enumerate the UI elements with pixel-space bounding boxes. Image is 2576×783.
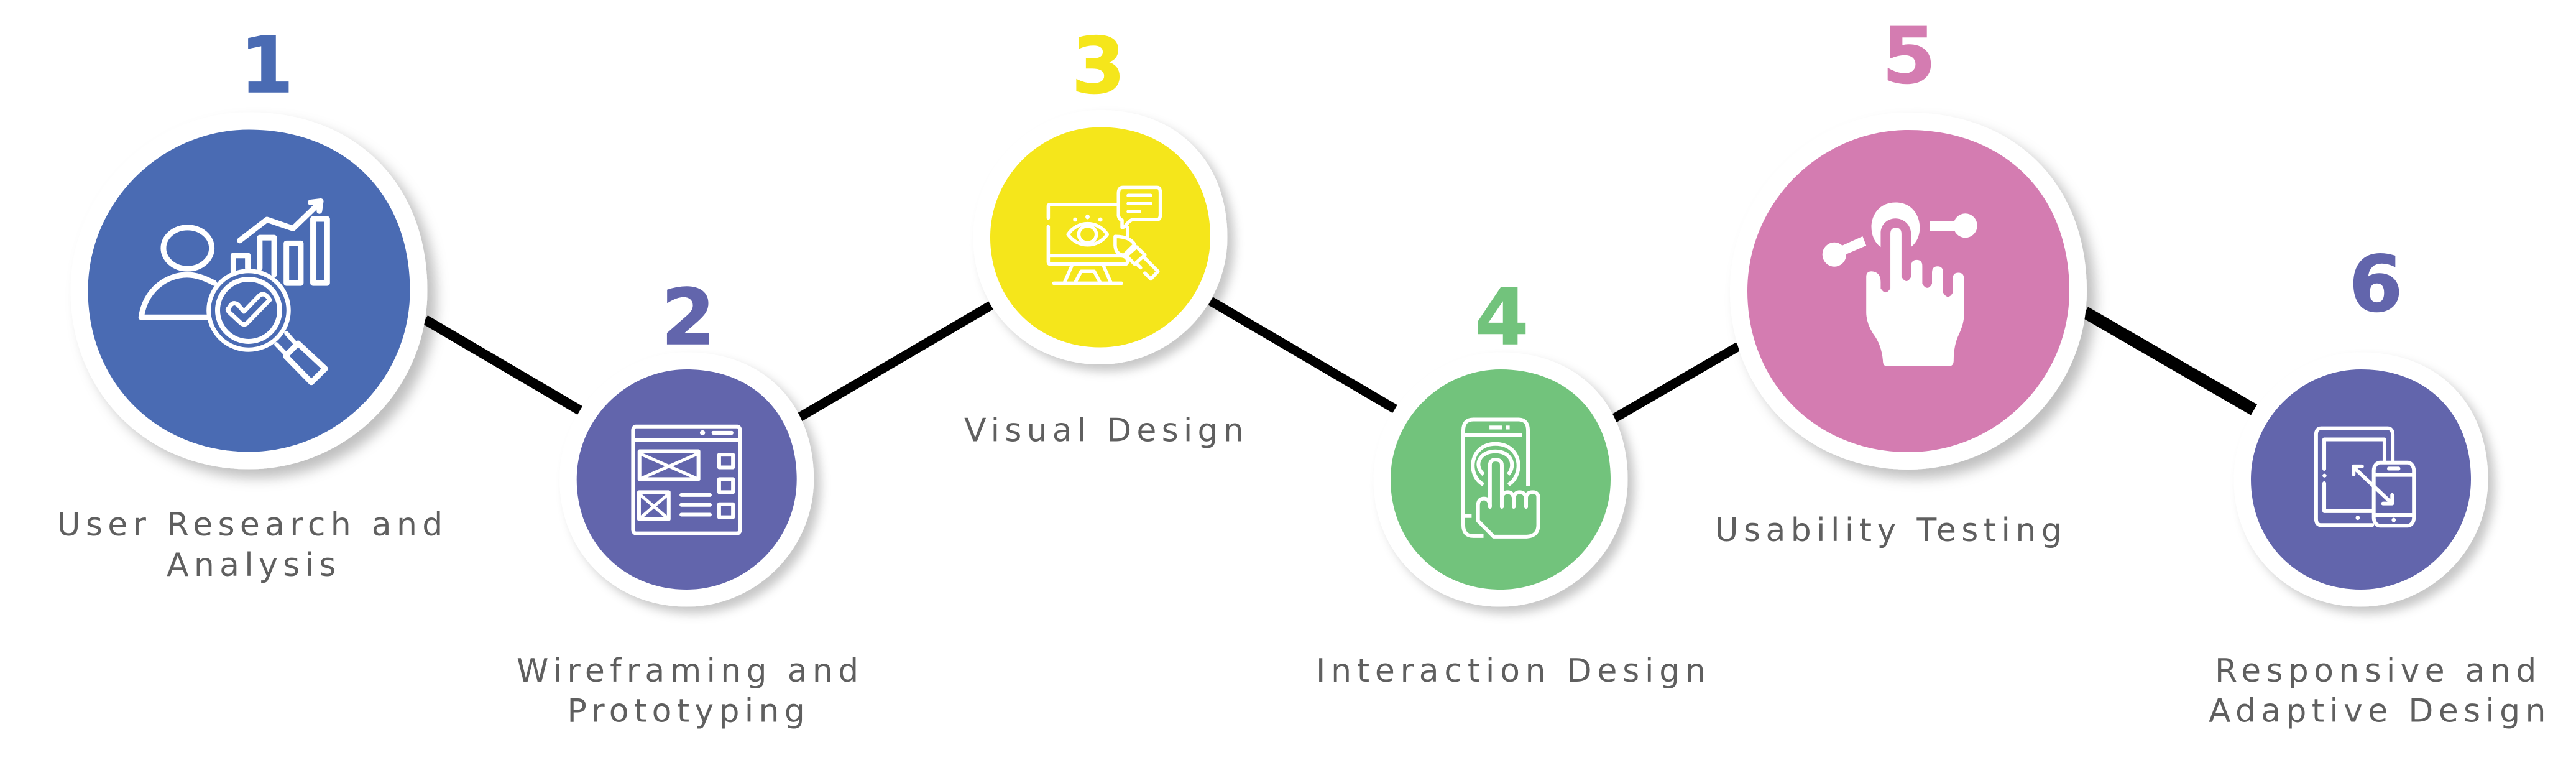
number 1: 1 bbox=[240, 21, 293, 111]
circle badge 1 bbox=[71, 112, 428, 469]
icon: wireframe window bbox=[633, 427, 740, 534]
icon: tablet and phone with resize arrow bbox=[2316, 429, 2414, 526]
connector lines bbox=[425, 301, 2254, 419]
step 1: user research and analysis bbox=[57, 21, 448, 584]
label 4: Interaction Design bbox=[1316, 652, 1711, 690]
circle badge 5 bbox=[1730, 113, 2087, 470]
step 6: responsive and adaptive design bbox=[2209, 240, 2551, 730]
circle badge 2 bbox=[559, 352, 814, 607]
label 6: Responsive and bbox=[2215, 652, 2542, 690]
label 1: User Research and bbox=[57, 506, 448, 544]
step 3: visual design bbox=[964, 21, 1249, 449]
label 2: Wireframing and bbox=[517, 652, 863, 690]
label 1: Analysis bbox=[167, 547, 341, 584]
number 2: 2 bbox=[661, 273, 715, 363]
step 4: interaction design bbox=[1316, 273, 1711, 690]
step 5: usability testing bbox=[1714, 11, 2087, 549]
label 6: Adaptive Design bbox=[2209, 693, 2551, 730]
number 5: 5 bbox=[1882, 11, 1936, 101]
step 2: wireframing and prototyping bbox=[517, 273, 863, 730]
label 3: Visual Design bbox=[964, 412, 1249, 449]
circle badge 6 bbox=[2234, 352, 2488, 607]
icon: hand swiping with touch points bbox=[1823, 202, 1977, 366]
icon: monitor with eye, brush and speech bubble bbox=[1048, 187, 1161, 283]
circle badge 3 bbox=[973, 110, 1227, 364]
number 4: 4 bbox=[1475, 273, 1529, 363]
number 3: 3 bbox=[1072, 21, 1125, 111]
icon: person with chart and magnifier bbox=[141, 201, 327, 382]
icon: phone with tapping hand bbox=[1463, 419, 1539, 537]
label 5: Usability Testing bbox=[1714, 512, 2067, 549]
circle badge 4 bbox=[1374, 352, 1627, 607]
label 2: Prototyping bbox=[567, 693, 810, 730]
number 6: 6 bbox=[2349, 240, 2403, 330]
